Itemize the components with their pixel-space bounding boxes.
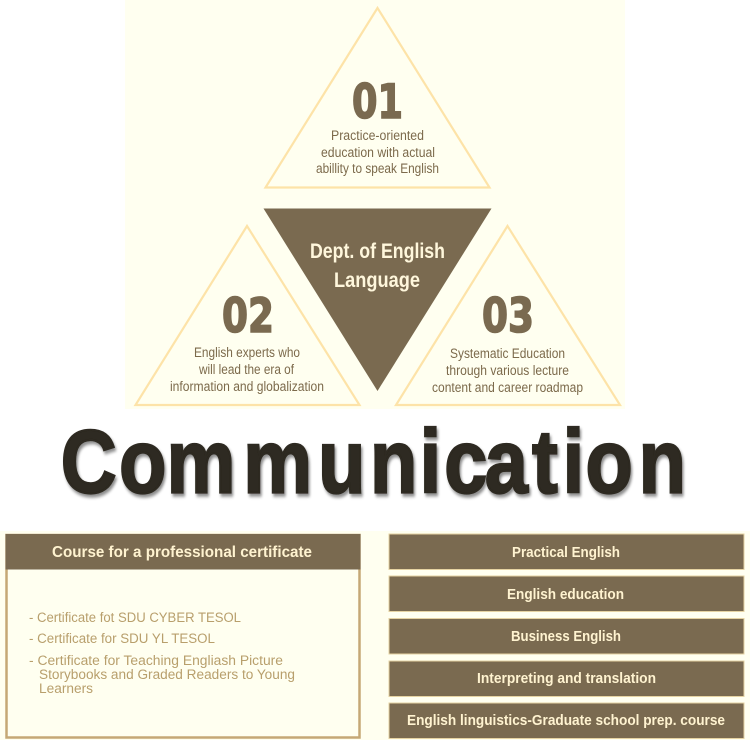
description 01: Practice-oriented — [331, 128, 424, 143]
inverted triangle shape — [264, 208, 492, 391]
track: Practical English: Practical English — [512, 545, 620, 561]
track: Practical English — [389, 534, 744, 570]
panel: professional certificate course — [6, 534, 360, 738]
track: English education — [389, 576, 744, 612]
panel: course tracks — [389, 534, 744, 738]
panel: triangle 02 — [136, 226, 360, 405]
description 02 — [170, 345, 324, 394]
central title — [310, 239, 445, 292]
description 02: information and globalization — [170, 379, 324, 394]
certificate list: Storybooks and Graded Readers to Young — [39, 667, 295, 682]
description 02: will lead the era of — [198, 362, 294, 377]
triangle outline 03 — [396, 226, 620, 405]
number 01: 01 — [352, 75, 403, 130]
central title: Dept. of English — [310, 239, 445, 263]
track: English linguistics: English linguistics-Graduate school prep. course — [407, 713, 725, 729]
description 03: content and career roadmap — [432, 380, 583, 395]
panel: triangle 01 — [266, 8, 490, 188]
description 03: Systematic Education — [450, 346, 565, 361]
track: Interpreting and translation — [389, 661, 744, 696]
track: English linguistics — [389, 703, 744, 738]
track: Interpreting and translation: Interpreting and translation — [477, 671, 656, 687]
panel header bar — [6, 534, 360, 570]
certificate list: - Certificate for Teaching Engliash Picture — [29, 653, 283, 668]
heading: Communication: Communication — [61, 411, 686, 512]
description 01 — [316, 128, 439, 176]
description 03 — [432, 346, 583, 395]
number 02: 02 — [222, 289, 274, 344]
description 03: through various lecture — [446, 363, 569, 378]
number 03: 03 — [482, 289, 534, 344]
description 01: abillity to speak English — [316, 161, 439, 176]
triangle outline 02 — [136, 226, 360, 405]
track: Business English — [389, 618, 744, 654]
panel: central inverted triangle — [264, 208, 492, 391]
triangle outline 01 — [266, 8, 490, 188]
panel: triangle 03 — [396, 226, 620, 405]
description 01: education with actual — [321, 145, 435, 160]
track: English education: English education — [507, 587, 624, 603]
panel body — [6, 535, 360, 738]
track: Business English: Business English — [511, 629, 621, 645]
certificate list: Learners — [39, 681, 93, 696]
certificate list — [29, 610, 295, 696]
central title: Language — [334, 268, 420, 292]
description 02: English experts who — [194, 345, 300, 360]
certificate list: - Certificate for SDU YL TESOL — [29, 631, 215, 646]
certificate list: - Certificate fot SDU CYBER TESOL — [29, 610, 241, 625]
panel header text: Course for a professional certificate — [52, 544, 312, 561]
